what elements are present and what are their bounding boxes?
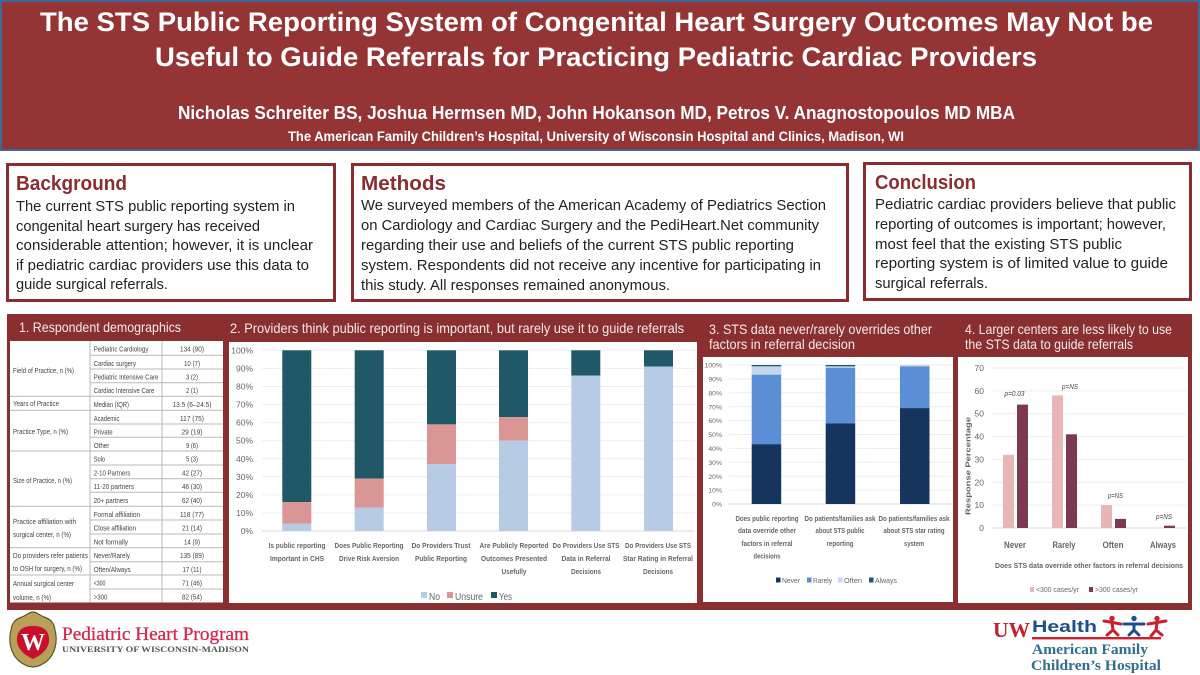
stacked bar chart: no, unsure, yes: Usefully [502,567,527,576]
stacked bar chart: never, rarely, often, always: 50% [708,432,722,439]
demographics table: to OSH for surgery, n (%) [13,564,82,573]
demographics table: Size of Practice, n (%) [13,476,72,485]
demographics table: Field of Practice, n (%) [13,366,74,375]
legend: chart 3: Never [782,576,800,585]
demographics table: 14 (9) [184,538,200,546]
stacked bar chart: never, rarely, often, always: 80% [708,390,722,397]
demographics table: 134 (90) [180,344,204,354]
grouped bar chart: response percentage by center volume: 50 [975,409,984,419]
stacked bar chart: no, unsure, yes [229,342,697,603]
demographics table: Other [94,441,110,450]
panel: results [7,314,1192,610]
logo: UW Health American Family Children's Hospital: Children’s Hospital [1031,658,1161,674]
demographics table: Cardiac surgery [94,359,136,368]
stacked bar chart: no, unsure, yes: Do Providers Trust [412,541,471,550]
demographics table: 71 (46) [182,578,202,588]
legend: chart 2: No [429,592,440,603]
demographics table: 13.5 (6–24.5) [172,400,212,409]
stacked bar chart: no, unsure, yes: Is public reporting [268,541,326,550]
demographics table: <300 [94,578,105,588]
demographics table: Often/Always [94,565,131,574]
legend: chart 2 [421,592,512,603]
background text: congenital heart surgery has received [16,219,260,235]
title: Useful to Guide Referrals for Practicing Pediatric Cardiac Providers [155,42,1037,72]
demographics table: Cardiac Intensive Care [94,386,154,395]
stacked bar chart: never, rarely, often, always: about STS public [816,526,864,535]
demographics table: Solo [94,454,105,464]
background text [16,199,313,293]
stacked bar chart: never, rarely, often, always: 90% [708,376,722,384]
conclusion text [875,197,1176,292]
demographics table: 29 (19) [182,428,203,436]
logo: UW Health American Family Children's Hospital: UW [993,618,1030,642]
demographics table: Years of Practice [13,399,59,408]
demographics table: 9 (6) [186,441,198,450]
authors: Nicholas Schreiter BS, Joshua Hermsen MD, John Hokanson MD, Petros V. Anagnostopoulos MD MBA [178,103,1015,123]
conclusion text: reporting system is of limited value to guide [875,256,1168,272]
demographics table: 42 (27) [182,468,202,478]
stacked bar chart: never, rarely, often, always: 60% [708,418,722,425]
methods text [361,198,826,294]
panel: conclusion [864,164,1190,300]
stacked bar chart: no, unsure, yes: Data in Referral [562,554,610,563]
icon: three children figures [1104,616,1166,636]
stacked bar chart: no, unsure, yes: 20% [236,490,253,500]
demographics table: Close affiliation [94,524,136,532]
methods text: on Cardiology and Cardiac Surgery and the PediHeart.Net community [361,218,820,234]
icon: university crest: W [21,630,45,656]
legend: chart 4: >300 cases/yr [1095,585,1138,594]
stacked bar chart: no, unsure, yes: Are Publicly Reported [480,541,549,550]
demographics table: 118 (77) [180,510,204,519]
panel: methods [352,164,848,300]
heading: background: Background [16,173,127,195]
stacked bar chart: no, unsure, yes: Decisions [643,567,673,576]
stacked bar chart: never, rarely, often, always: Do patients/families ask [804,514,876,523]
demographics table: Practice Type, n (%) [13,427,68,436]
grouped bar chart: response percentage by center volume: Does STS data override other factors in referral decisions [995,561,1183,570]
demographics table: surgical center, n (%) [13,530,71,539]
stacked bar chart: no, unsure, yes: Do Providers Use STS [552,541,620,550]
grouped bar chart: response percentage by center volume: 70 [975,363,984,373]
background text: The current STS public reporting system in [16,199,295,215]
conclusion text: Pediatric cardiac providers believe that public [875,197,1176,213]
legend: chart 3 [776,576,897,585]
stacked bar chart: no, unsure, yes: 60% [236,418,253,428]
legend: chart 2: Yes [499,592,512,603]
stacked bar chart: never, rarely, often, always: decisions [754,552,780,560]
header banner [1,1,1199,150]
background text: if pediatric cardiac providers use this data to [16,258,309,274]
methods text: system. Respondents did not receive any incentive for participating in [361,258,821,274]
demographics table: 21 (14) [182,524,202,532]
stacked bar chart: never, rarely, often, always: 10% [708,488,722,495]
stacked bar chart: no, unsure, yes: 30% [236,472,253,482]
heading: section 4 [965,321,1172,352]
grouped bar chart: response percentage by center volume: 10 [975,500,984,510]
demographics table: Never/Rarely [94,551,130,560]
stacked bar chart: no, unsure, yes: 40% [236,454,253,464]
demographics table: Pediatric Intensive Care [94,372,158,382]
section 1: respondent demographics [10,319,223,602]
methods text: regarding their use and beliefs of the current STS public reporting [361,238,794,254]
stacked bar chart: never, rarely, often, always: 0% [712,502,722,509]
stacked bar chart: no, unsure, yes: Decisions [571,567,601,576]
stacked bar chart: never, rarely, often, always: 30% [708,460,722,467]
logo: UW Health American Family Children's Hospital: Health [1032,617,1097,636]
demographics table: 135 (89) [180,551,204,560]
grouped bar chart: response percentage by center volume: Rarely [1052,540,1076,551]
section 4: center size comparison [958,321,1188,603]
demographics table: 10 (7) [184,359,200,368]
demographics table: 11-20 partners [94,482,134,491]
legend: chart 3: Often [844,576,862,585]
grouped bar chart: response percentage by center volume: p=NS [1155,512,1172,521]
grouped bar chart: response percentage by center volume: Always [1150,540,1176,551]
conclusion text: most feel that the existing STS public [875,237,1122,253]
affiliation: The American Family Children’s Hospital, University of Wisconsin Hospital and Clinics, Madison, WI [288,129,904,144]
stacked bar chart: never, rarely, often, always: Does public reporting [736,514,799,523]
heading: section 4: the STS data to guide referrals [965,336,1133,352]
grouped bar chart: response percentage by center volume: Response Percentage [964,417,972,515]
demographics table: 2 (1) [186,386,198,395]
logo: pediatric heart program: Pediatric Heart Program [62,624,249,645]
background text: guide surgical referrals. [16,277,168,293]
logo: pediatric heart program [10,612,249,667]
stacked bar chart: no, unsure, yes: Drive Risk Aversion [339,554,399,563]
heading: section 4: 4. Larger centers are less likely to use [965,321,1172,337]
stacked bar chart: never, rarely, often, always: 20% [708,474,722,481]
legend: chart 3: Always [875,576,897,585]
stacked bar chart: no, unsure, yes: 80% [236,382,253,392]
stacked bar chart: never, rarely, often, always: 100% [705,363,722,370]
legend: chart 4 [1030,585,1138,594]
heading: section 3: factors in referral decision [709,336,855,352]
methods text: We surveyed members of the American Academy of Pediatrics Section [361,198,826,214]
grouped bar chart: response percentage by center volume: 40 [975,432,984,442]
stacked bar chart: never, rarely, often, always [703,357,953,602]
stacked bar chart: no, unsure, yes: Outcomes Presented [481,554,547,563]
stacked bar chart: no, unsure, yes: Star Rating in Referral [623,554,693,563]
demographics table: 62 (40) [182,496,202,505]
grouped bar chart: response percentage by center volume: 0 [979,523,984,533]
legend: chart 3: Rarely [813,576,832,585]
section 3: STS data override [703,321,953,602]
demographics table: Private [94,428,113,436]
grouped bar chart: response percentage by center volume: 30 [975,454,984,464]
panel: background [8,164,334,300]
demographics table: 20+ partners [94,496,129,505]
demographics table: 2-10 Partners [94,468,131,478]
conclusion text: reporting of outcomes is important; however, [875,217,1166,233]
grouped bar chart: response percentage by center volume: p=0.03 [1004,389,1025,398]
demographics table: Academic [94,414,120,423]
demographics table: Do providers refer patients [13,551,88,560]
stacked bar chart: no, unsure, yes: 10% [236,508,253,518]
stacked bar chart: no, unsure, yes: 90% [236,363,253,373]
grouped bar chart: response percentage by center volume: p=NS [1061,382,1078,391]
demographics table: Formal affiliation [94,510,140,519]
logo: UW Health American Family Children's Hospital [993,616,1166,674]
heading: section 3: 3. STS data never/rarely overrides other [709,321,932,337]
legend: chart 2: Unsure [455,592,483,603]
stacked bar chart: no, unsure, yes: 70% [236,400,253,410]
demographics table: 17 (11) [182,565,202,574]
grouped bar chart: response percentage by center volume: 20 [975,477,984,487]
heading: section 3 [709,321,932,352]
demographics table: volume, n (%) [13,593,51,602]
stacked bar chart: never, rarely, often, always: about STS star rating [884,526,945,535]
demographics table: >300 [94,592,107,602]
demographics table: 5 (3) [186,454,198,464]
grouped bar chart: response percentage by center volume [958,357,1188,603]
grouped bar chart: response percentage by center volume: p=NS [1107,491,1123,500]
conclusion text: surgical referrals. [875,276,988,292]
title [40,7,1153,72]
logo: pediatric heart program: UNIVERSITY OF WISCONSIN-MADISON [62,645,249,654]
demographics table: 82 (54) [182,592,202,602]
stacked bar chart: never, rarely, often, always: system [904,539,924,548]
stacked bar chart: no, unsure, yes: 100% [231,345,253,355]
section 2: public reporting beliefs [229,320,697,603]
methods text: this study. All responses remained anonymous. [361,278,670,294]
stacked bar chart: never, rarely, often, always: factors in referral [742,539,792,548]
demographics table: 46 (30) [182,482,202,491]
stacked bar chart: never, rarely, often, always: Do patients/families ask [878,514,950,523]
grouped bar chart: response percentage by center volume: Never [1004,540,1026,551]
stacked bar chart: no, unsure, yes: Do Providers Use STS [625,541,691,550]
heading: section 2: 2. Providers think public reporting is important, but rarely use it to guide referrals [230,320,684,336]
icon: university crest [10,612,56,667]
demographics table: 117 (75) [180,414,204,423]
grouped bar chart: response percentage by center volume: 60 [975,386,984,396]
heading: methods: Methods [361,173,446,195]
stacked bar chart: no, unsure, yes: Public Reporting [415,554,467,563]
stacked bar chart: no, unsure, yes: 50% [236,436,253,446]
heading: respondent demographics: 1. Respondent demographics [19,319,181,335]
grouped bar chart: response percentage by center volume: Often [1102,540,1124,551]
stacked bar chart: never, rarely, often, always: 40% [708,446,722,453]
demographics table: Median (IQR) [94,400,129,409]
stacked bar chart: never, rarely, often, always: 70% [708,404,722,411]
demographics table: 3 (2) [186,372,198,382]
stacked bar chart: never, rarely, often, always: data override other [738,526,796,535]
stacked bar chart: never, rarely, often, always: reporting [826,539,854,548]
background text: considerable attention; however, it is unclear [16,238,313,254]
heading: conclusion: Conclusion [875,172,976,194]
title: The STS Public Reporting System of Congenital Heart Surgery Outcomes May Not be [40,7,1153,37]
legend: chart 4: <300 cases/yr [1036,585,1079,594]
stacked bar chart: no, unsure, yes: Does Public Reporting [334,541,404,550]
logo: UW Health American Family Children's Hospital: American Family [1032,642,1149,658]
stacked bar chart: no, unsure, yes: Important in CHS [270,554,324,563]
demographics table: Not formally [94,538,128,546]
demographics table [10,341,223,602]
demographics table: Annual surgical center [13,579,74,588]
demographics table: Practice affiliation with [13,517,76,526]
stacked bar chart: no, unsure, yes: 0% [241,526,253,536]
demographics table: Pediatric Cardiology [94,344,149,354]
